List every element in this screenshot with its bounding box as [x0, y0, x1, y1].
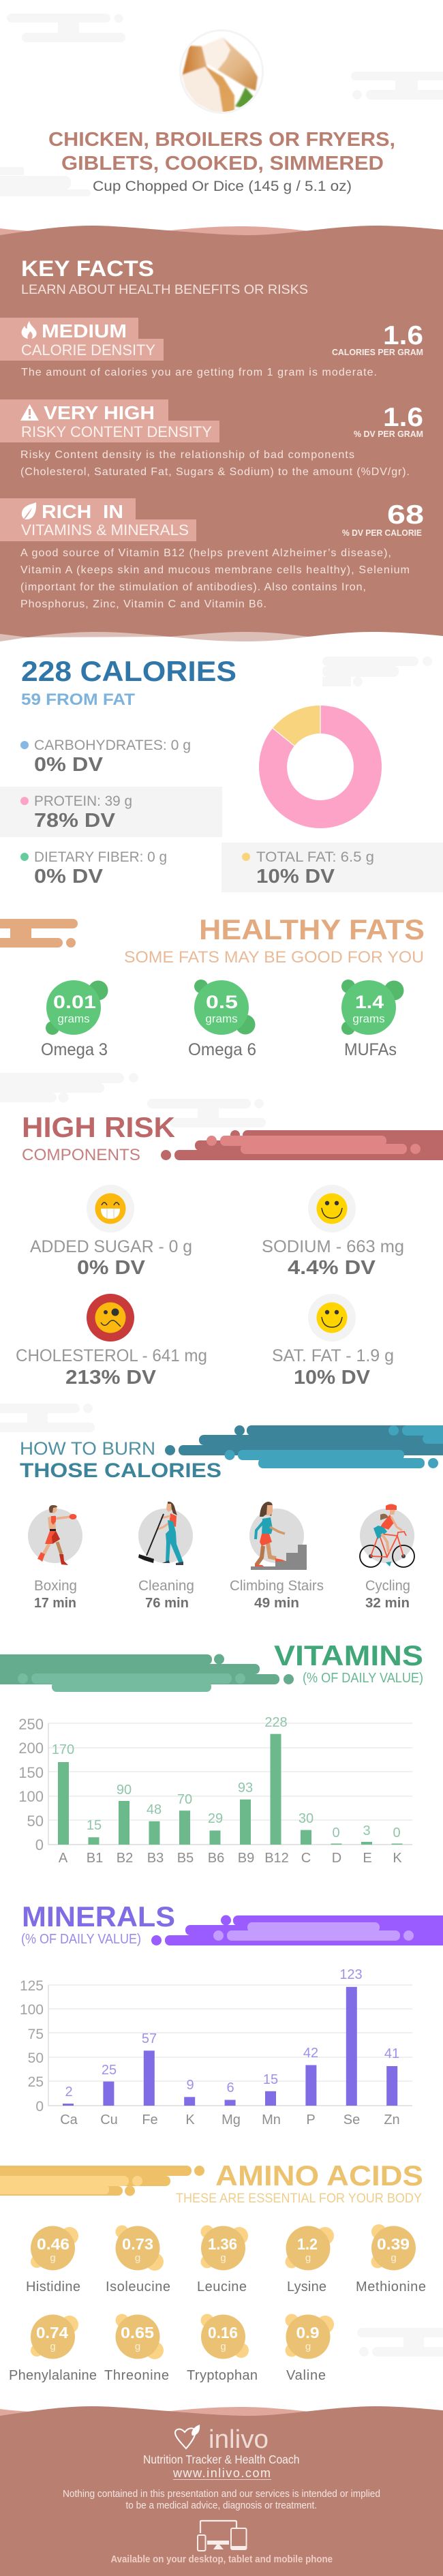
bar chart: vitamins: B2 [117, 1851, 133, 1866]
risk: added sugar: ADDED SUGAR - 0 g [30, 1237, 192, 1256]
amino acid: methionine [356, 2224, 426, 2294]
bar chart: vitamins: 150 [18, 1764, 44, 1781]
stat: omega 6 [188, 980, 256, 1059]
bar chart: vitamins: 228 [264, 1715, 288, 1730]
amino acid: isoleucine: Isoleucine [106, 2279, 170, 2294]
bar chart: vitamins: 200 [18, 1740, 44, 1757]
amino acid: threonine: 0.65 [121, 2324, 154, 2342]
amino acid: leucine [197, 2225, 248, 2294]
fact: calorie density: CALORIE DENSITY [21, 342, 155, 359]
bar chart: minerals [20, 1967, 412, 2127]
amino acid: valine: Valine [286, 2368, 326, 2383]
bar chart: vitamins: 170 [52, 1742, 74, 1757]
fact: calorie density: 1.6 [383, 321, 423, 350]
legend: dietary fiber [20, 849, 167, 888]
amino acid: leucine: 1.36 [208, 2235, 237, 2253]
bar chart: vitamins: B5 [177, 1851, 194, 1866]
bar chart: vitamins: 90 [117, 1783, 132, 1798]
bar chart: minerals: 2 [65, 2085, 73, 2100]
legend: protein: PROTEIN: 39 g [34, 793, 132, 809]
bar chart: vitamins: D [332, 1851, 341, 1866]
bar chart: minerals: 41 [384, 2046, 399, 2061]
fact: calorie density: MEDIUM [42, 320, 127, 342]
bar chart: minerals: 25 [102, 2063, 117, 2078]
heading: calories: 228 CALORIES [21, 655, 236, 687]
amino acid: threonine: Threonine [104, 2368, 169, 2383]
legend: carbohydrates: 0% DV [34, 754, 104, 776]
amino acid: isoleucine [106, 2225, 170, 2294]
bar chart: minerals: 100 [20, 2002, 44, 2018]
heading: key facts [21, 256, 308, 297]
bar chart: minerals: Mg [222, 2112, 241, 2127]
fact: rich in vitamins and minerals: RICH IN [42, 501, 123, 522]
legend: total fat [242, 849, 374, 888]
bar chart: vitamins: 29 [208, 1811, 223, 1826]
amino acid: phenylalanine: Phenylalanine [9, 2368, 97, 2383]
stat: MUFAs [341, 980, 403, 1059]
heading: minerals: MINERALS [22, 1900, 175, 1933]
donut chart: macronutrients [259, 706, 382, 828]
icon: leaf [22, 502, 36, 519]
amino acid: lysine [285, 2226, 334, 2294]
website link: www.inlivo.com [172, 2466, 271, 2480]
amino acid: methionine: g [391, 2252, 397, 2264]
amino acid: phenylalanine: g [50, 2341, 56, 2352]
fact: risky content density [0, 399, 423, 478]
legend: protein [20, 793, 132, 832]
serving size subtitle: Cup Chopped Or Dice (145 g / 5.1 oz) [93, 179, 352, 194]
activity: cleaning: Cleaning [138, 1578, 194, 1594]
amino acid: valine [285, 2314, 334, 2383]
fact: rich in vitamins and minerals: (important for the stimulation of antibodies). Also contains Iron, [20, 581, 366, 593]
amino acid: phenylalanine [9, 2315, 97, 2383]
fact: rich in vitamins and minerals: A good source of Vitamin B12 (helps prevent Alzheimer’s disease), [20, 547, 391, 559]
icon: inlivo heart logo [175, 2425, 200, 2449]
bar chart: minerals: K [185, 2112, 195, 2127]
amino acid: leucine: g [220, 2252, 226, 2264]
amino acid: histidine [26, 2226, 80, 2294]
bar chart: minerals: Zn [384, 2112, 400, 2127]
fact: risky content density: 1.6 [383, 403, 423, 432]
title: CHICKEN, BROILERS OR FRYERS, [48, 129, 395, 151]
disclaimer: to be a medical advice, diagnosis or treatment. [125, 2500, 317, 2511]
panel: footer [0, 2406, 443, 2576]
heading: how to burn those calories [20, 1438, 222, 1482]
figure: cyclist [360, 1504, 414, 1567]
bar chart: vitamins: 15 [87, 1818, 102, 1833]
risk: cholesterol: 213% DV [65, 1367, 157, 1389]
amino acid: lysine: 1.2 [297, 2235, 318, 2253]
bar chart: vitamins: B3 [147, 1851, 164, 1866]
heading: high risk: COMPONENTS [22, 1146, 140, 1164]
fact: risky content density: VERY HIGH [44, 402, 155, 423]
heading: key facts: KEY FACTS [21, 256, 154, 281]
legend: protein: 78% DV [34, 810, 116, 832]
fact: risky content density: % DV PER GRAM [354, 429, 423, 439]
activity: boxing [28, 1505, 82, 1611]
legend: dietary fiber: DIETARY FIBER: 0 g [34, 849, 167, 865]
title [48, 129, 395, 175]
fact: rich in vitamins and minerals [0, 498, 424, 610]
heading: minerals: (% OF DAILY VALUE) [21, 1932, 141, 1947]
legend: total fat: TOTAL FAT: 6.5 g [256, 849, 374, 865]
heading: key facts: LEARN ABOUT HEALTH BENEFITS OR RISKS [21, 283, 308, 297]
disclaimer: Nothing contained in this presentation and our services is intended or implied [63, 2489, 380, 2500]
bar chart: minerals: 123 [339, 1967, 363, 1982]
heading: vitamins: VITAMINS [274, 1639, 423, 1671]
amino acid: leucine: Leucine [197, 2279, 247, 2294]
amino acid: tryptophan [187, 2314, 258, 2383]
bar chart: vitamins: A [59, 1851, 68, 1866]
amino acid: lysine: g [305, 2252, 311, 2264]
bar chart: minerals: 75 [28, 2027, 44, 2042]
stat: omega 3: Omega 3 [41, 1040, 108, 1059]
amino acid: phenylalanine: 0.74 [36, 2324, 68, 2342]
stat: omega 6: grams [205, 1012, 238, 1025]
heading: healthy fats: HEALTHY FATS [199, 913, 425, 945]
bar chart: vitamins: E [363, 1851, 372, 1866]
risk: added sugar [30, 1185, 192, 1279]
risk: sodium [262, 1185, 404, 1279]
bar chart: minerals: Se [343, 2112, 360, 2127]
bar chart: vitamins: K [393, 1851, 402, 1866]
stat: MUFAs: MUFAs [344, 1040, 397, 1059]
activity: climbing stairs: Climbing Stairs [230, 1578, 324, 1594]
fact: rich in vitamins and minerals: % DV PER CALORIE [342, 528, 422, 538]
heading: amino acids [176, 2160, 423, 2206]
amino acid: threonine: g [135, 2341, 140, 2352]
heading: how to burn those calories: HOW TO BURN [20, 1438, 155, 1459]
fact: rich in vitamins and minerals: 68 [387, 500, 424, 530]
bar chart: vitamins: 48 [147, 1802, 162, 1817]
risk: sodium: SODIUM - 663 mg [262, 1237, 404, 1256]
bar chart: minerals: Fe [142, 2112, 158, 2127]
heading: amino acids: THESE ARE ESSENTIAL FOR YOUR BODY [176, 2191, 422, 2206]
bar chart: minerals: 25 [28, 2074, 44, 2090]
legend: carbohydrates [20, 738, 191, 776]
amino acid: histidine: 0.46 [37, 2235, 70, 2253]
amino acid: threonine [104, 2314, 169, 2383]
risk: cholesterol [16, 1294, 207, 1389]
activity: cycling: Cycling [365, 1578, 410, 1594]
heading: high risk [22, 1111, 175, 1164]
figure: person sweeping [138, 1502, 183, 1565]
amino acid: valine: g [305, 2341, 311, 2352]
stat: omega 3: grams [57, 1012, 90, 1025]
fact: risky content density: RISKY CONTENT DENSITY [21, 423, 212, 440]
heading: minerals [21, 1900, 175, 1947]
bar chart: vitamins: 3 [363, 1823, 371, 1838]
bar chart: vitamins: B6 [208, 1851, 224, 1866]
activity: climbing stairs [230, 1502, 324, 1611]
legend background: total fat [222, 843, 443, 892]
title: GIBLETS, COOKED, SIMMERED [61, 153, 384, 175]
fact: calorie density: The amount of calories you are getting from 1 gram is moderate. [21, 367, 377, 378]
activity: climbing stairs: 49 min [254, 1596, 299, 1611]
bar chart: vitamins: 70 [177, 1792, 192, 1807]
icon: warning triangle [20, 404, 39, 421]
figure: boxer [37, 1505, 76, 1565]
legend: carbohydrates: CARBOHYDRATES: 0 g [34, 738, 191, 753]
amino acid: tryptophan: g [220, 2341, 226, 2352]
bar chart: vitamins: 0 [332, 1825, 340, 1840]
bar chart: minerals: Ca [60, 2112, 78, 2127]
fact: rich in vitamins and minerals: Phosphorus, Zinc, Vitamin C and Vitamin B6. [20, 598, 266, 610]
bar chart: minerals: 15 [263, 2072, 278, 2087]
amino acid: histidine: g [50, 2252, 56, 2264]
tagline: Nutrition Tracker & Health Coach [143, 2453, 300, 2466]
activity: cleaning: 76 min [145, 1596, 189, 1611]
heading: calories: 59 FROM FAT [21, 691, 135, 709]
amino acid: methionine: 0.39 [377, 2235, 410, 2253]
fact: risky content density: (Cholesterol, Saturated Fat, Sugars & Sodium) to the amount (%DV/gr). [20, 466, 410, 478]
bar chart: vitamins: 93 [238, 1781, 253, 1795]
amino acid: histidine: Histidine [26, 2279, 80, 2294]
activity: cycling: 32 min [365, 1596, 410, 1611]
bar chart: vitamins: 0 [35, 1836, 44, 1853]
panel: key facts [0, 226, 443, 641]
fact: rich in vitamins and minerals: Vitamin A (keeps skin and mucous membrane cells healthy), Selenium [20, 564, 410, 576]
heading: healthy fats [124, 913, 425, 967]
icon: desktop, tablet and phone [198, 2521, 247, 2551]
legend: dietary fiber: 0% DV [34, 866, 104, 888]
activity: boxing: 17 min [34, 1596, 76, 1611]
stat: omega 6: Omega 6 [188, 1040, 256, 1059]
bar chart: vitamins: B9 [238, 1851, 254, 1866]
bar chart: minerals: P [306, 2112, 316, 2127]
amino acid: valine: 0.9 [296, 2324, 319, 2342]
heading: vitamins: (% OF DAILY VALUE) [303, 1671, 423, 1686]
brand name: inlivo [209, 2425, 269, 2454]
bar chart: vitamins: 250 [18, 1716, 44, 1733]
bar chart: minerals: 42 [303, 2046, 318, 2061]
fact: calorie density [0, 318, 423, 378]
heading: healthy fats: SOME FATS MAY BE GOOD FOR YOU [124, 948, 424, 967]
bar chart: vitamins: 30 [299, 1811, 314, 1826]
legend: total fat: 10% DV [256, 866, 335, 888]
stat: omega 3 [41, 980, 108, 1059]
fact: risky content density: Risky Content density is the relationship of bad components [20, 449, 354, 461]
activity: cycling [360, 1504, 414, 1611]
bar chart: minerals: 0 [35, 2099, 44, 2115]
stat: MUFAs: grams [352, 1012, 385, 1025]
activity: boxing: Boxing [34, 1578, 77, 1594]
amino acid: methionine: Methionine [356, 2279, 426, 2294]
bar chart: vitamins: 0 [393, 1825, 401, 1840]
amino acid: isoleucine: g [135, 2252, 140, 2264]
amino acid: lysine: Lysine [287, 2279, 326, 2294]
bar chart: minerals: 6 [226, 2080, 234, 2095]
amino acid: tryptophan: 0.16 [208, 2324, 238, 2342]
bar chart: vitamins: B1 [87, 1851, 103, 1866]
risk: saturated fat: 10% DV [294, 1367, 371, 1389]
heading: high risk: HIGH RISK [22, 1111, 175, 1143]
heading: calories [21, 655, 236, 709]
risk: saturated fat [272, 1294, 394, 1389]
stat: omega 3: 0.01 [53, 992, 96, 1012]
bar chart: vitamins: C [301, 1851, 311, 1866]
risk: sodium: 4.4% DV [288, 1257, 376, 1279]
risk: cholesterol: CHOLESTEROL - 641 mg [16, 1346, 207, 1365]
food photo: chicken pieces [179, 29, 264, 114]
bar chart: minerals: 125 [20, 1978, 44, 1994]
heading: vitamins [274, 1639, 423, 1686]
bar chart: vitamins: B12 [264, 1851, 289, 1866]
legend background: protein [0, 787, 222, 837]
risk: saturated fat: SAT. FAT - 1.9 g [272, 1346, 394, 1365]
icon: flame [22, 321, 37, 339]
bar chart: minerals: 57 [142, 2031, 157, 2046]
availability note: Available on your desktop, tablet and mobile phone [110, 2554, 333, 2565]
fact: calorie density: CALORIES PER GRAM [332, 348, 423, 357]
stat: omega 6: 0.5 [206, 992, 238, 1012]
heading: amino acids: AMINO ACIDS [215, 2160, 423, 2192]
bar chart: minerals: 9 [186, 2078, 194, 2093]
stat: MUFAs: 1.4 [355, 992, 384, 1012]
amino acid: tryptophan: Tryptophan [187, 2368, 258, 2383]
bar chart: vitamins: 50 [27, 1813, 44, 1830]
heading: how to burn those calories: THOSE CALORIES [20, 1459, 222, 1482]
bar chart: minerals: Cu [100, 2112, 118, 2127]
fact: rich in vitamins and minerals: VITAMINS & MINERALS [21, 521, 189, 539]
bar chart: vitamins: 100 [18, 1788, 44, 1805]
bar chart: minerals: 50 [28, 2050, 44, 2066]
risk: added sugar: 0% DV [77, 1257, 146, 1279]
figure: stairs and climber [251, 1502, 307, 1570]
activity: cleaning [138, 1502, 194, 1611]
disclaimer [63, 2489, 380, 2511]
bar chart: vitamins [18, 1715, 412, 1866]
bar chart: minerals: Mn [262, 2112, 281, 2127]
amino acid: isoleucine: 0.73 [122, 2235, 153, 2253]
